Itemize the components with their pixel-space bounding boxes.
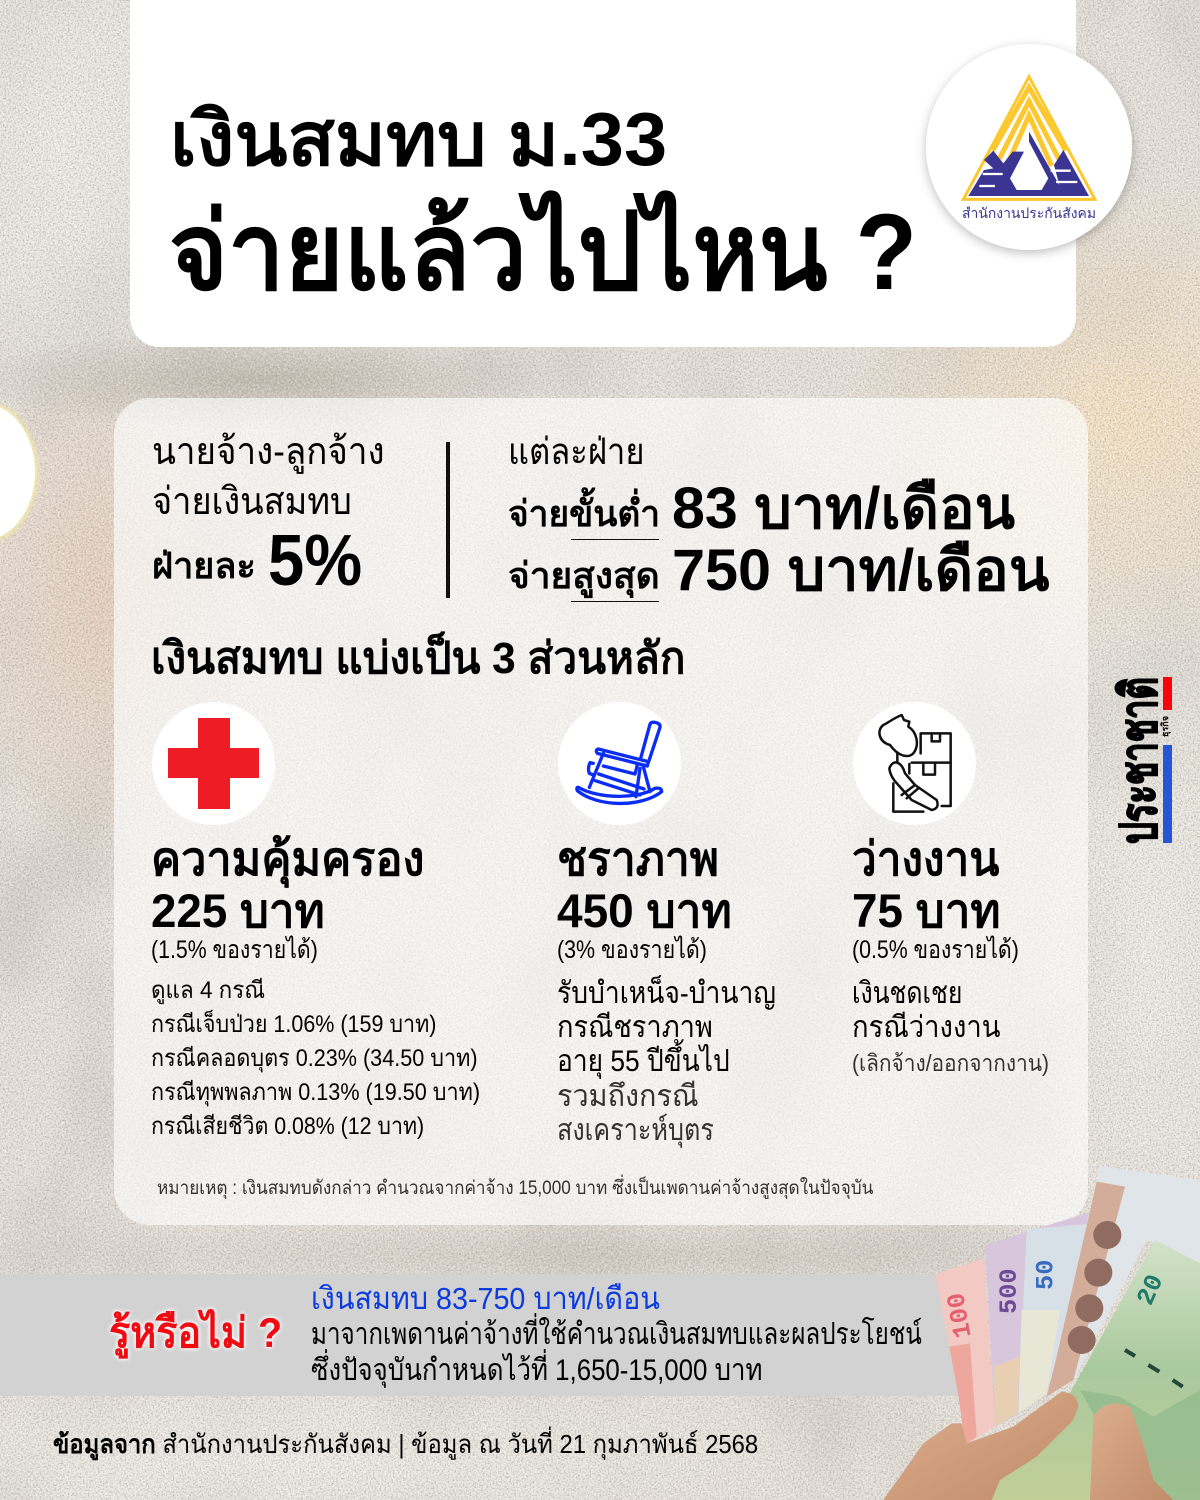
banknote: 500 bbox=[985, 1213, 1088, 1427]
description line: รวมถึงกรณี bbox=[557, 1080, 699, 1113]
callout headline: เงินสมทบ 83-750 บาท/เดือน bbox=[311, 1281, 660, 1316]
amount: 75 บาท bbox=[852, 884, 1001, 937]
logo: social security office bbox=[920, 42, 1137, 258]
column: unemployment bbox=[852, 832, 1049, 1076]
text: employer and employee pay 5% bbox=[152, 431, 385, 601]
text line: each side: แต่ละฝ่าย bbox=[508, 431, 644, 472]
callout body line: มาจากเพดานค่าจ้างที่ใช้คำนวณเงินสมทบและผลประโยชน์ bbox=[311, 1318, 922, 1351]
list item: กรณีเสียชีวิต 0.08% (12 บาท) bbox=[151, 1113, 424, 1140]
text: minimum and maximum payment bbox=[508, 431, 1049, 603]
list item: กรณีทุพพลภาพ 0.13% (19.50 บาท) bbox=[151, 1079, 480, 1106]
description line: เงินชดเชย bbox=[852, 977, 962, 1010]
description line: รับบำเหน็จ-บำนาญ bbox=[557, 977, 776, 1010]
share of income: (1.5% ของรายได้) bbox=[151, 936, 318, 964]
hand bbox=[883, 1392, 1173, 1500]
column heading: ความคุ้มครอง bbox=[151, 832, 425, 885]
title line 2: จ่ายแล้วไปไหน ? bbox=[169, 191, 917, 312]
text line: each side: ฝ่ายละ bbox=[152, 545, 256, 586]
source line: ข้อมูลจาก สำนักงานประกันสังคม | ข้อมูล ณ วันที่ 21 กุมภาพันธ์ 2568 bbox=[53, 1429, 758, 1459]
underline minimum bbox=[571, 539, 659, 540]
column heading: ชราภาพ bbox=[557, 832, 719, 885]
title line 1: เงินสมทบ ม.33 bbox=[170, 97, 667, 181]
callout body line: ซึ่งปัจจุบันกำหนดไว้ที่ 1,650-15,000 บาท bbox=[311, 1354, 763, 1387]
brand sub label: ธุรกิจ bbox=[1160, 716, 1170, 737]
list item: กรณีเจ็บป่วย 1.06% (159 บาท) bbox=[151, 1011, 436, 1038]
share of income: (3% ของรายได้) bbox=[557, 936, 707, 964]
underline maximum bbox=[571, 601, 659, 602]
banknote: 500: 500 bbox=[995, 1268, 1024, 1314]
callout heading: รู้หรือไม่ ? bbox=[109, 1309, 282, 1356]
banknote: 1000 bbox=[1047, 1166, 1200, 1397]
minimum amount: 83 บาท/เดือน bbox=[672, 476, 1015, 541]
text line: minimum label: จ่ายขั้นต่ำ bbox=[508, 493, 660, 534]
maximum amount: 750 บาท/เดือน bbox=[672, 538, 1049, 603]
list item: ดูแล 4 กรณี bbox=[151, 977, 265, 1004]
text line: pay contribution: จ่ายเงินสมทบ bbox=[152, 481, 352, 523]
blue bar bbox=[1163, 745, 1172, 843]
banknote: 20 bbox=[992, 1240, 1200, 1500]
column: old age bbox=[557, 832, 776, 1148]
red bar bbox=[1163, 677, 1172, 710]
icon: red cross bbox=[152, 702, 275, 825]
description line: สงเคราะห์บุตร bbox=[557, 1114, 714, 1147]
text line: employer-employee: นายจ้าง-ลูกจ้าง bbox=[152, 431, 385, 473]
footnote: หมายเหตุ : เงินสมทบดังกล่าว คำนวณจากค่าจ้าง 15,000 บาท ซึ่งเป็นเพดานค่าจ้างสูงสุดในปัจจุบัน bbox=[157, 1178, 873, 1199]
banknote: 20: 20 bbox=[1131, 1270, 1170, 1310]
figure: 5%: 5% bbox=[268, 521, 362, 601]
amount: 450 บาท bbox=[557, 884, 732, 937]
text line: maximum label: จ่ายสูงสุด bbox=[508, 555, 660, 596]
amount: 225 บาท bbox=[151, 884, 325, 937]
banknote: 50: 50 bbox=[1032, 1260, 1061, 1290]
banknote: 100 bbox=[935, 1258, 995, 1445]
icon: person carrying boxes bbox=[853, 702, 976, 825]
brand wordmark: ประชาชาติ bbox=[1111, 677, 1167, 844]
list item: กรณีคลอดบุตร 0.23% (34.50 บาท) bbox=[151, 1045, 478, 1072]
panel: main content bbox=[114, 398, 1088, 1225]
description note: (เลิกจ้าง/ออกจากงาน) bbox=[852, 1050, 1049, 1076]
band: did you know bbox=[0, 1274, 965, 1396]
left glow blob bbox=[0, 404, 35, 540]
icon: rocking chair bbox=[558, 702, 681, 825]
description line: อายุ 55 ปีขึ้นไป bbox=[557, 1045, 730, 1078]
heading: three main parts: เงินสมทบ แบ่งเป็น 3 ส่วนหลัก bbox=[151, 634, 685, 683]
vertical divider bbox=[446, 442, 450, 598]
description line: กรณีว่างงาน bbox=[852, 1011, 1000, 1044]
illustration: hand holding banknotes bbox=[884, 1166, 1200, 1500]
banknote: 50 bbox=[1018, 1224, 1087, 1413]
logo: social security office: สำนักงานประกันสังคม bbox=[962, 205, 1096, 221]
column heading: ว่างงาน bbox=[852, 832, 999, 885]
brand: Prachachat bbox=[1111, 677, 1172, 844]
list: four cases bbox=[151, 977, 480, 1140]
banknote: 100: 100 bbox=[942, 1290, 979, 1340]
share of income: (0.5% ของรายได้) bbox=[852, 936, 1019, 964]
description line: กรณีชราภาพ bbox=[557, 1011, 713, 1044]
panel: title bbox=[130, 0, 1076, 347]
column: protection bbox=[151, 832, 480, 1140]
